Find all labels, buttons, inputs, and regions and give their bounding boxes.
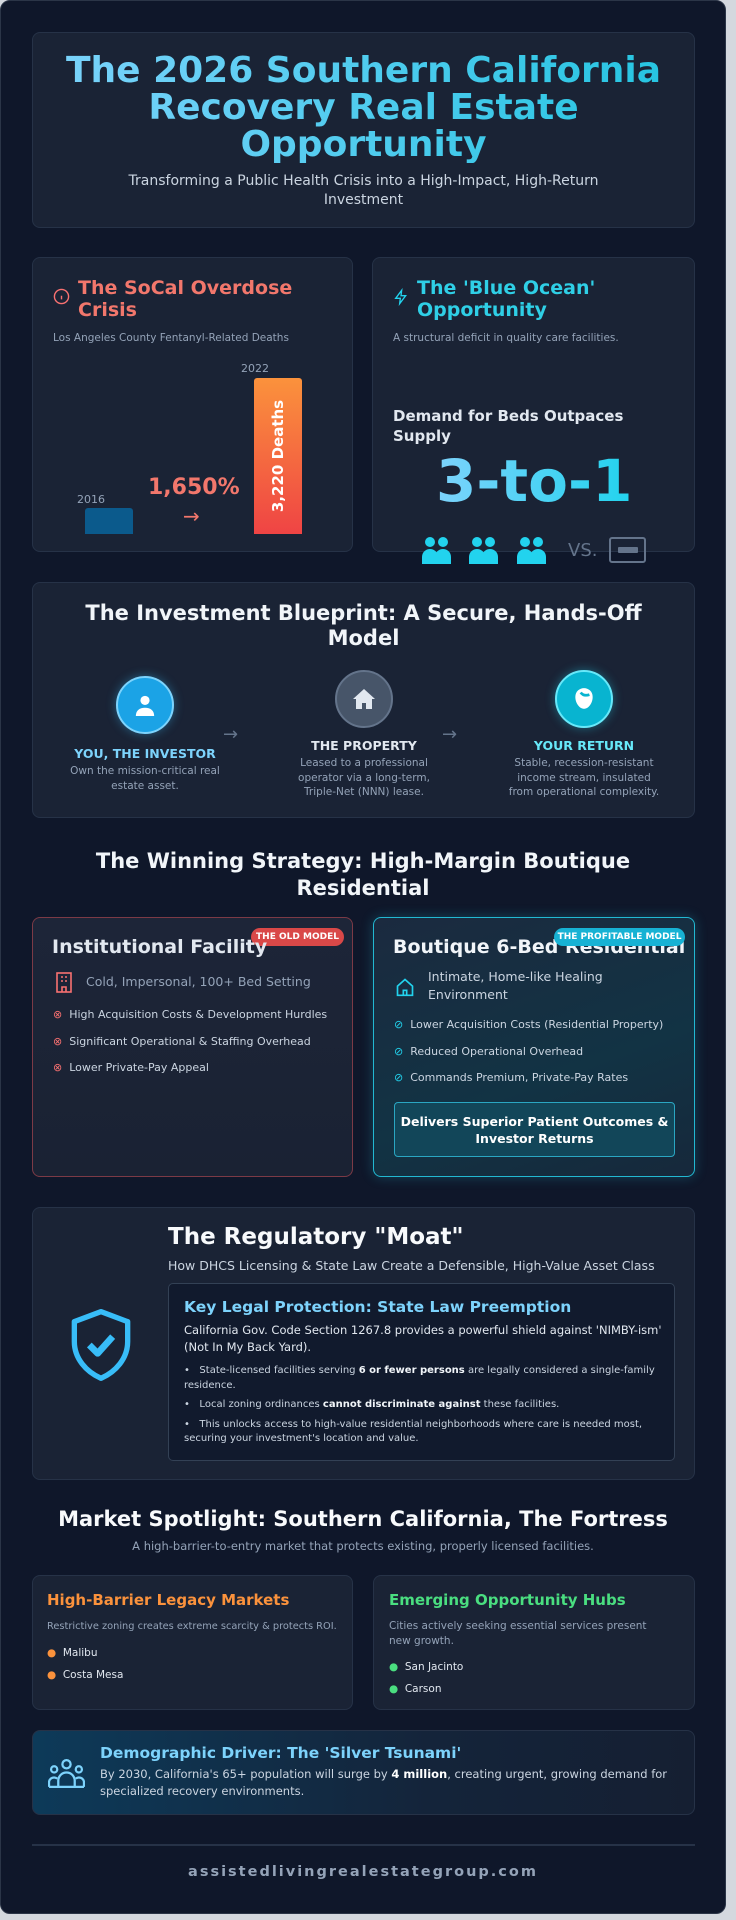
heading: The Regulatory "Moat" xyxy=(168,1224,464,1250)
panel: overdose crisis xyxy=(32,257,353,552)
subtitle with icon xyxy=(56,972,311,993)
step: property: Leased to a professional xyxy=(300,757,428,769)
header card xyxy=(32,32,695,228)
bar chart: 1,650% xyxy=(148,475,240,500)
list: locations xyxy=(389,1661,463,1695)
step: property: operator via a long-term, xyxy=(298,772,430,784)
panel: blue ocean xyxy=(372,257,695,552)
panel: demographic driver xyxy=(32,1730,695,1815)
heading: Opportunity xyxy=(417,299,547,321)
panel: demographic driver: By 2030, California's 65+ population will surge by 4 million, creating urgent, growing demand for specialized recovery environments. xyxy=(100,1767,667,1798)
list: locations: ● San Jacinto xyxy=(389,1661,463,1673)
panel: demographic driver: Demographic Driver: The 'Silver Tsunami' xyxy=(100,1744,461,1762)
icon: bolt xyxy=(394,288,407,306)
big stat: 3-to-1 xyxy=(436,447,632,515)
list: drawbacks: ⊗ Significant Operational & Staffing Overhead xyxy=(53,1035,311,1048)
subtitle: Los Angeles County Fentanyl-Related Deaths xyxy=(53,332,289,344)
subtitle: How DHCS Licensing & State Law Create a Defensible, High-Value Asset Class xyxy=(168,1258,655,1273)
bar chart: 3,220 Deaths xyxy=(269,400,287,512)
badge: THE PROFITABLE MODEL xyxy=(558,932,681,942)
heading: winning strategy: Residential xyxy=(297,876,429,900)
inner box: legal protection: • State-licensed facilities serving 6 or fewer persons are legally considered a single-family residence. xyxy=(184,1365,655,1390)
demand text: Supply xyxy=(393,427,451,445)
step: property: Triple-Net (NNN) lease. xyxy=(304,786,424,798)
step: return: from operational complexity. xyxy=(509,786,659,798)
panel: profitable model xyxy=(373,917,695,1177)
demand text: Demand for Beds Outpaces xyxy=(393,407,623,425)
bar chart: → xyxy=(183,504,200,528)
heading xyxy=(85,601,642,650)
bar chart xyxy=(77,362,302,534)
step: investor: Own the mission-critical real xyxy=(70,765,220,777)
subtitle xyxy=(128,173,598,208)
bar chart: 2016 xyxy=(77,493,105,506)
list: drawbacks: ⊗ Lower Private-Pay Appeal xyxy=(53,1061,209,1074)
subtitle: Investment xyxy=(324,192,403,208)
icons: people vs bed: VS. xyxy=(568,540,597,561)
list: benefits: ⊘ Lower Acquisition Costs (Residential Property) xyxy=(394,1018,663,1031)
title: Opportunity xyxy=(240,124,487,165)
inner box: legal protection: Key Legal Protection: State Law Preemption xyxy=(184,1298,571,1316)
title: Recovery Real Estate xyxy=(148,87,579,128)
footer: assistedlivingrealestategroup.com xyxy=(188,1864,538,1880)
heading: Model xyxy=(328,626,399,650)
subtitle with icon: Intimate, Home-like Healing xyxy=(428,969,603,984)
heading: market spotlight: Market Spotlight: Southern California, The Fortress xyxy=(58,1507,668,1531)
heading xyxy=(417,277,595,321)
icon: shield xyxy=(72,1309,130,1381)
heading: Crisis xyxy=(78,299,137,321)
badge: THE OLD MODEL xyxy=(256,932,339,942)
list: locations: ● Carson xyxy=(389,1683,441,1695)
list: benefits: ⊘ Commands Premium, Private-Pay Rates xyxy=(394,1071,628,1084)
list: locations: ● Costa Mesa xyxy=(47,1669,123,1681)
heading: The Investment Blueprint: A Secure, Hands-Off xyxy=(85,601,642,625)
step: property xyxy=(298,670,430,798)
badge xyxy=(251,928,344,946)
panel: emerging hubs xyxy=(373,1575,695,1710)
heading: The SoCal Overdose xyxy=(78,277,292,299)
badge xyxy=(554,928,685,946)
demand text xyxy=(393,407,623,445)
panel: legacy markets: High-Barrier Legacy Markets xyxy=(47,1591,289,1609)
callout: Delivers Superior Patient Outcomes & xyxy=(401,1114,668,1129)
subtitle: Transforming a Public Health Crisis into a High-Impact, High-Return xyxy=(129,173,598,189)
callout xyxy=(394,1102,675,1157)
heading: winning strategy xyxy=(96,849,630,900)
inner box: legal protection: • Local zoning ordinances cannot discriminate against these facilities. xyxy=(184,1399,559,1410)
heading: winning strategy: The Winning Strategy: High-Margin Boutique xyxy=(96,849,630,873)
list: benefits: ⊘ Reduced Operational Overhead xyxy=(394,1045,583,1058)
icon: group xyxy=(48,1759,85,1788)
heading: The 'Blue Ocean' xyxy=(417,277,595,299)
step: investor: YOU, THE INVESTOR xyxy=(74,746,216,761)
step: investor xyxy=(70,670,220,792)
inner box: legal protection: California Gov. Code Section 1267.8 provides a powerful shield against 'NIMBY-ism' (Not In My Back Yard). xyxy=(184,1323,662,1354)
callout: Investor Returns xyxy=(475,1131,594,1146)
icon: info xyxy=(54,288,70,304)
step: return: YOUR RETURN xyxy=(534,738,634,753)
title: Boutique 6-Bed Residential xyxy=(393,936,685,958)
step: return xyxy=(509,664,659,798)
heading xyxy=(78,277,292,321)
bar chart: 2022 xyxy=(241,362,269,375)
step: return: income stream, insulated xyxy=(517,772,651,784)
icons: people vs bed xyxy=(422,537,646,564)
list: benefits xyxy=(394,1018,663,1084)
subtitle with icon: Environment xyxy=(428,987,508,1002)
arrow: → xyxy=(223,724,238,745)
panel: legacy markets xyxy=(32,1575,353,1710)
arrow: → xyxy=(442,724,457,745)
step: return: Stable, recession-resistant xyxy=(514,757,654,769)
panel: emerging hubs: Emerging Opportunity Hubs xyxy=(389,1591,626,1609)
step: property: THE PROPERTY xyxy=(311,738,417,753)
list: drawbacks: ⊗ High Acquisition Costs & Development Hurdles xyxy=(53,1008,327,1021)
panel: investment blueprint xyxy=(32,582,695,818)
list: locations xyxy=(47,1647,123,1681)
subtitle with icon xyxy=(396,969,603,1002)
panel: emerging hubs: Cities actively seeking essential services present new growth. xyxy=(389,1620,647,1647)
title: Institutional Facility xyxy=(52,936,267,958)
panel: old model xyxy=(32,917,353,1177)
title: The 2026 Southern California xyxy=(66,50,661,91)
panel: legacy markets: Restrictive zoning creates extreme scarcity & protects ROI. xyxy=(47,1621,337,1632)
subtitle: A structural deficit in quality care facilities. xyxy=(393,332,619,344)
list: locations: ● Malibu xyxy=(47,1647,98,1659)
list: drawbacks xyxy=(53,1008,327,1074)
subtitle with icon: Cold, Impersonal, 100+ Bed Setting xyxy=(86,974,311,989)
panel: regulatory moat xyxy=(32,1207,695,1480)
inner box: legal protection xyxy=(168,1283,675,1461)
subheading: A high-barrier-to-entry market that protects existing, properly licensed facilities. xyxy=(132,1539,594,1553)
step: investor: estate asset. xyxy=(111,780,179,792)
inner box: legal protection: • This unlocks access to high-value residential neighborhoods where care is needed most, securing your investment's location and value. xyxy=(184,1418,642,1444)
title xyxy=(33,52,694,163)
